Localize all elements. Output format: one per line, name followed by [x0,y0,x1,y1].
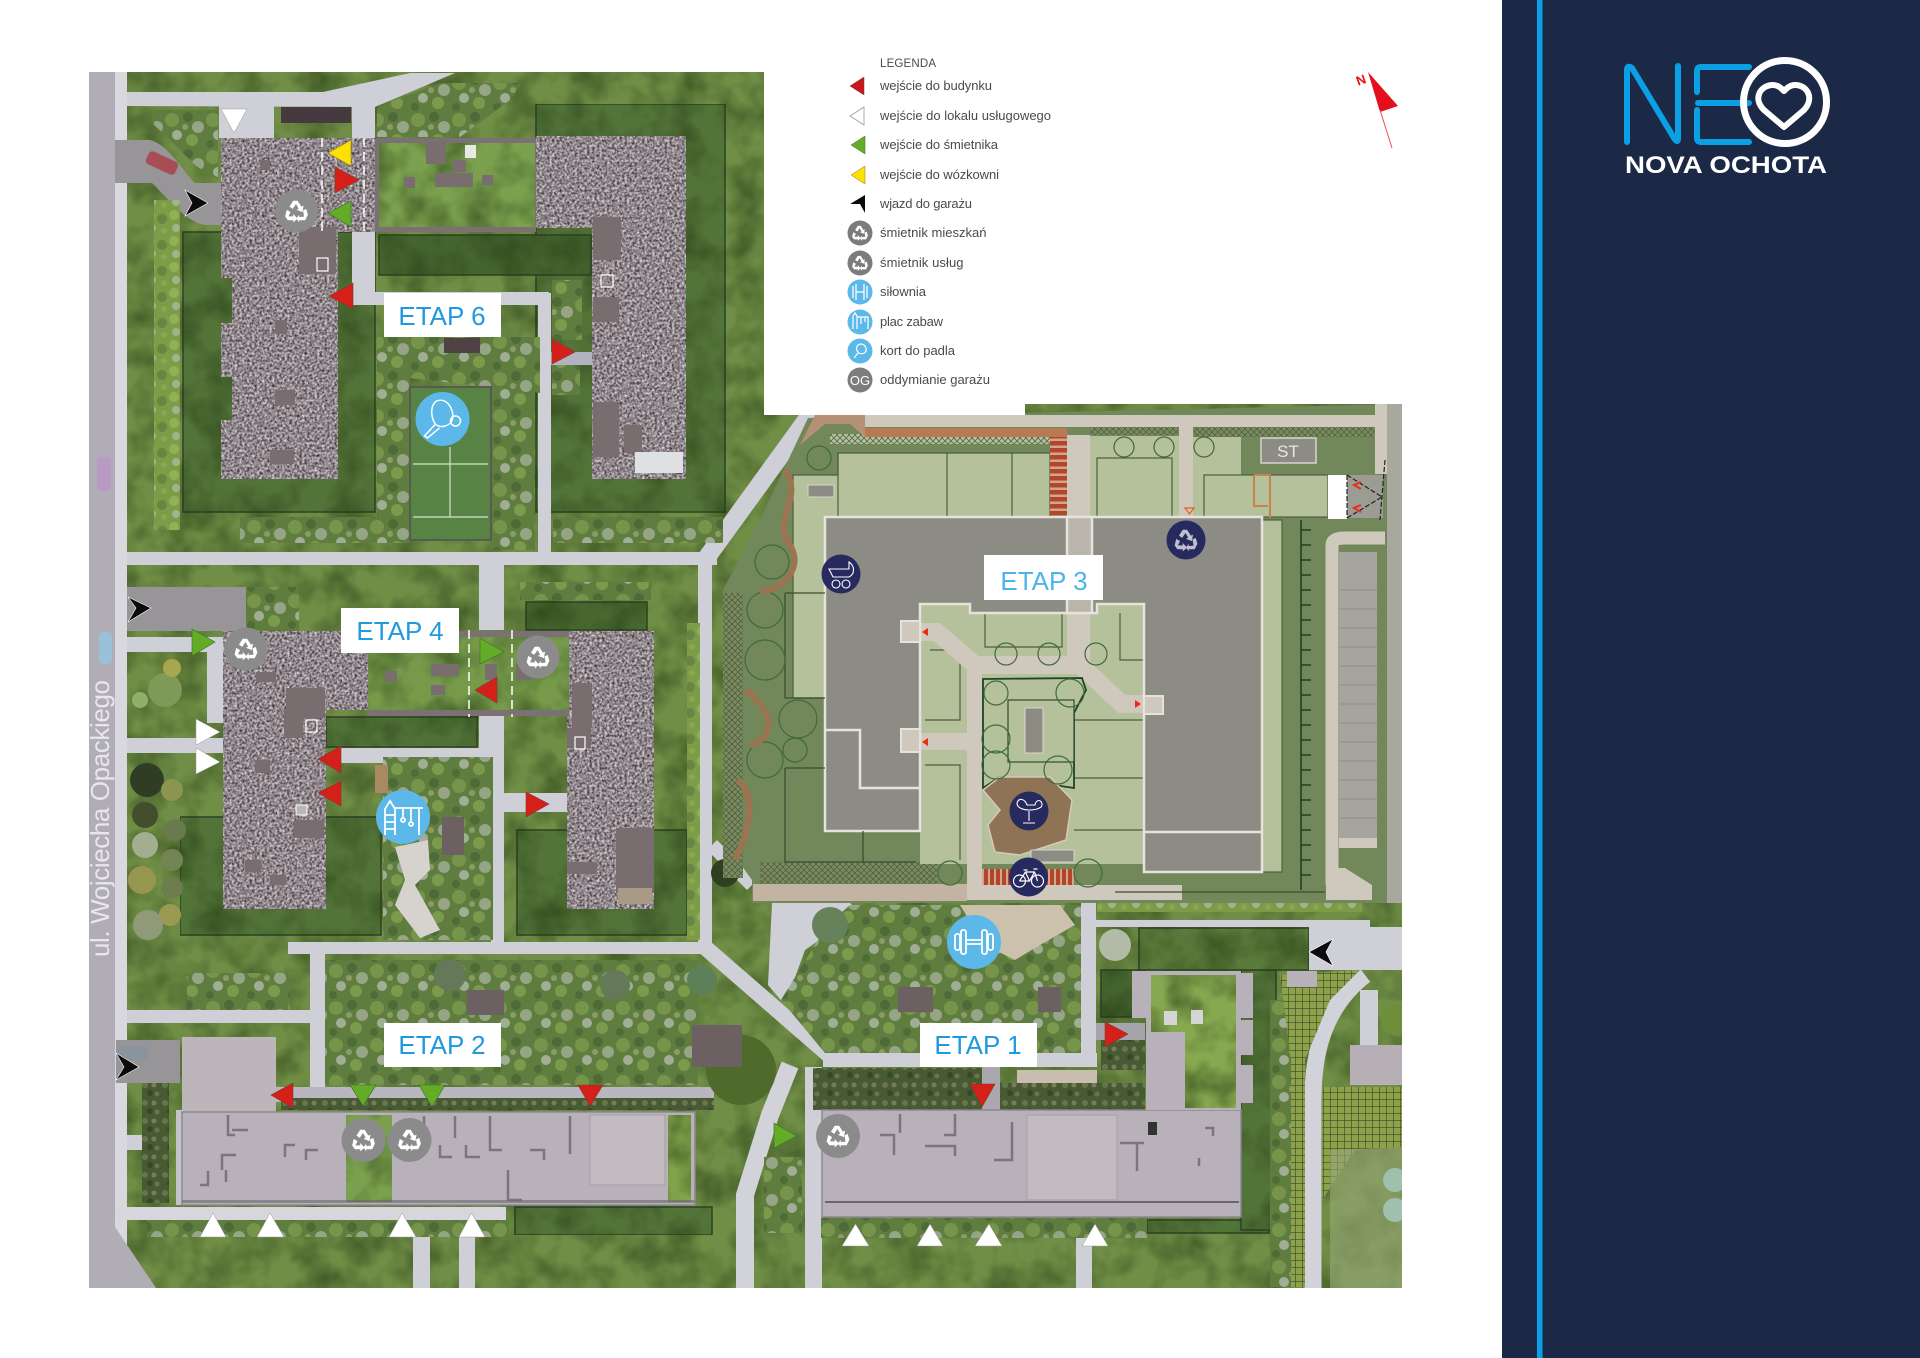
etap 3 entrances [901,621,1163,752]
trees [128,659,1413,1222]
etap 3 courtyard paths over lawn [909,613,1153,900]
legend: building entrance [850,77,992,95]
legend: garage smoke vent: OG [850,373,870,388]
building: etap 4 [223,630,654,909]
icon: playground [376,790,430,844]
etap 3 orange outline [1254,475,1270,518]
legend: residents waste: śmietnik mieszkań [880,225,986,240]
etap 3 lawns [793,436,1328,872]
north arrow: N [1354,71,1368,89]
recycling markers [224,190,860,1162]
logo: NEO Nova Ochota [1625,60,1827,179]
label: ETAP 2: ETAP 2 [398,1030,486,1060]
label: ETAP 6: ETAP 6 [398,301,486,331]
service entrance markers: white [196,109,1108,1246]
legend: garage smoke vent: oddymianie garażu [880,372,990,387]
garage entrance markers: black [116,190,1333,1080]
icon: stroller [822,554,860,594]
etap 3 ST box: ST [1277,442,1299,461]
etap 3 service road [1387,404,1402,903]
icon: gym [947,915,1001,969]
legend: stroller room entrance [851,166,999,184]
etap 3 grey pads [808,485,1074,862]
legend: padel court: kort do padla [880,343,956,358]
legend: waste entrance [851,136,999,154]
padel court [410,387,491,540]
legend: residents waste [848,220,986,246]
legend: waste entrance: wejście do śmietnika [879,137,999,152]
etap 3 garage ramp [1328,460,1385,520]
label: ETAP 2 [384,1023,501,1067]
street name: ul. Wojciecha Opackiego [85,680,115,957]
garage ramps [115,140,246,1083]
etap 3 entrance markers [922,508,1194,746]
legend: playground: plac zabaw [880,314,944,329]
label: ETAP 1 [920,1023,1037,1067]
building: etap 6 [221,136,686,479]
etap 3 bottom hedge [1097,903,1362,912]
etap 3 olive ground [723,404,1402,903]
building: etap 1 [822,971,1402,1217]
site plan map [89,72,1413,1288]
legend: gym: siłownia [880,284,927,299]
etap 3 ST box [1261,438,1316,463]
icon: play equipment [1010,792,1048,830]
dark hedged lawns [180,104,1309,1235]
etap 3 green enclosure [983,678,1086,788]
icon: padel court [416,392,470,446]
etap 3 playground [983,777,1072,855]
legend [848,58,1051,392]
legend: padel court [848,338,956,364]
legend: building entrance: wejście do budynku [879,78,992,93]
huts [281,107,1061,1067]
label: ETAP 3 [984,555,1103,600]
label: ETAP 3: ETAP 3 [1000,566,1088,596]
etap 3 inner court [1008,700,1074,762]
legend title: LEGENDA [880,58,936,70]
etap 3 building footprint [825,517,1262,872]
building: etap 2 [176,1037,695,1205]
etap 3 bike racks [865,428,1074,885]
etap 3 hatched bands [723,418,1374,885]
etap 3 brown path [735,470,795,860]
etap 3 plan [723,404,1402,912]
stroller room entrance marker: yellow [328,140,351,166]
gardens [142,83,1402,1288]
etap 3 parking [1339,552,1377,838]
legend: garage entrance: wjazd do garażu [879,196,972,211]
icon: bicycle [1009,858,1048,896]
right panel [1502,0,1920,1358]
street and sidewalk [89,72,156,1288]
etap 3 corridor [1067,517,1092,613]
etap 3 tree outlines [745,437,1214,887]
legend: garage entrance [850,195,972,213]
legend: playground [848,310,944,334]
waste room entrance markers: green [192,201,797,1148]
etap 3 paving [753,404,1387,901]
vehicles [97,150,179,1060]
label: ETAP 1: ETAP 1 [934,1030,1022,1060]
label: ETAP 4: ETAP 4 [356,616,444,646]
legend: services waste: śmietnik usług [880,255,964,270]
logo: NEO Nova Ochota: NOVA OCHOTA [1625,152,1827,179]
legend: garage smoke vent [848,368,990,392]
paved paths [115,73,1402,1288]
label: ETAP 4 [341,608,459,653]
icon: recycling bins [1166,520,1206,560]
legend: stroller room entrance: wejście do wózkowni [879,167,999,182]
legend: services waste [848,250,964,276]
building entrance markers: red [271,167,1128,1108]
grass base [89,72,1402,1288]
legend: gym [848,280,927,304]
etap 3 dark outline lawn [785,593,1325,892]
etap 3 ladder hedge [1301,520,1311,890]
north arrow [1354,71,1398,148]
label: ETAP 6 [384,293,501,337]
legend: service entrance: wejście do lokalu usługowego [879,108,1051,123]
